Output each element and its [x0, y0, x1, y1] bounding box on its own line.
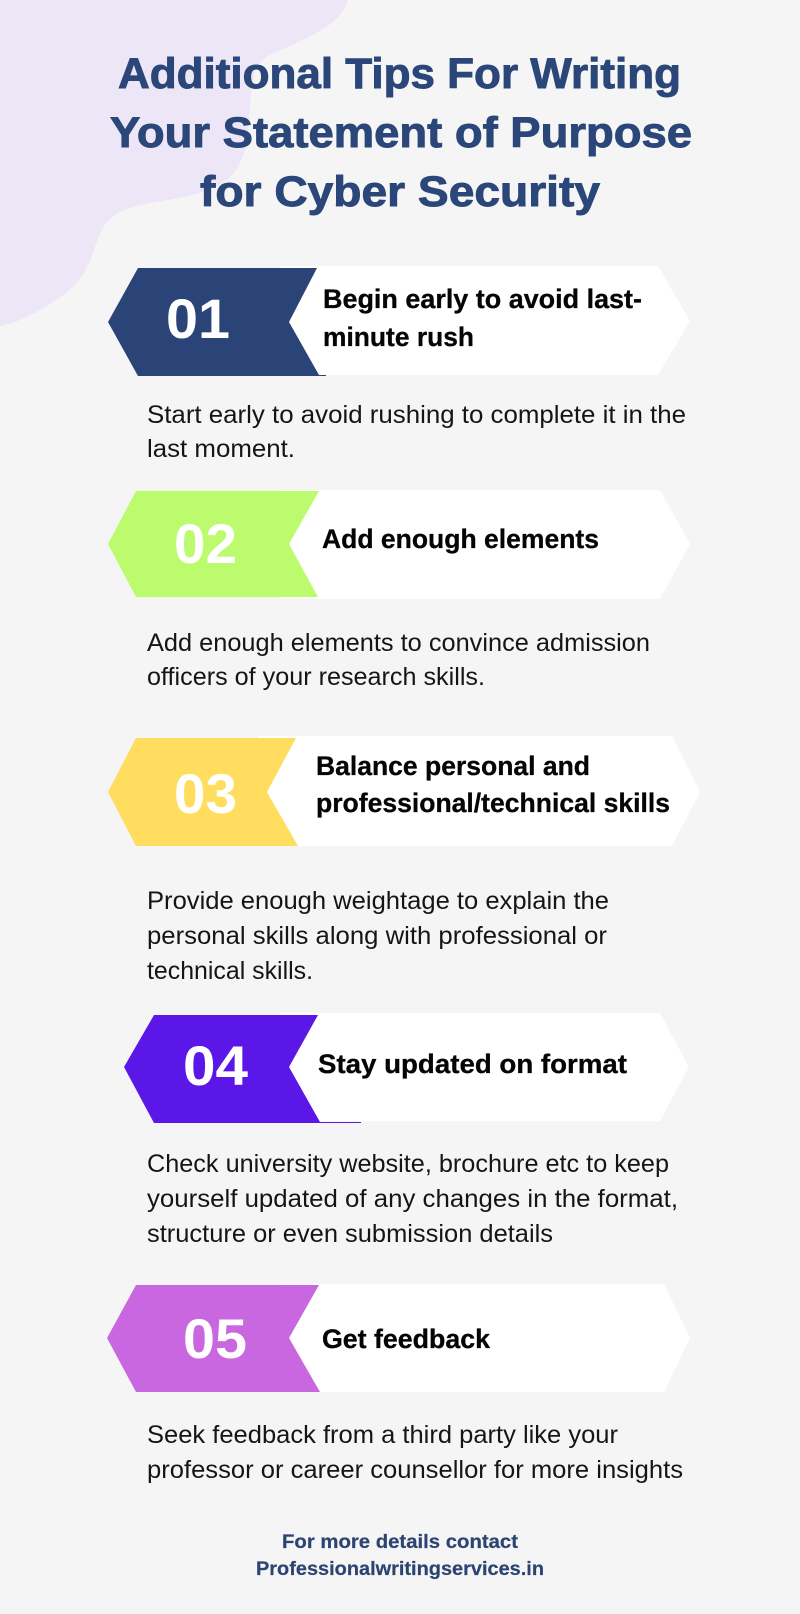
number tab: green [108, 491, 319, 597]
banner background: white arrow [258, 736, 700, 846]
number tab: yellow [108, 738, 298, 846]
number 01: 01 [166, 287, 230, 350]
panel: tip 05 banner [107, 1284, 690, 1392]
heading: tip 04: Stay updated on format [318, 1049, 627, 1079]
footer: contact details: For more details contact [282, 1532, 519, 1553]
number 03: 03 [174, 762, 237, 825]
title: Additional Tips For Writing [118, 50, 681, 98]
text block: tip 05 description: Seek feedback from a third party like your [147, 1421, 618, 1449]
panel: tip 03 banner [108, 736, 700, 846]
text block: tip 02 description: officers of your research skills. [147, 663, 485, 691]
panel: tip 04 banner [124, 1013, 689, 1123]
heading: tip 01 [323, 284, 642, 352]
panel: tip 02 banner [108, 490, 690, 599]
heading: tip 05: Get feedback [322, 1324, 491, 1354]
panel: tip 01 banner [108, 266, 690, 376]
number tab: navy [108, 268, 326, 376]
title [110, 50, 692, 216]
footer: contact details: Professionalwritingservices.in [256, 1559, 544, 1580]
banner background: white arrow [280, 490, 690, 599]
text block: tip 04 description: structure or even submission details [147, 1220, 553, 1248]
heading: tip 03: professional/technical skills [316, 788, 670, 818]
title: for Cyber Security [200, 168, 600, 216]
text block: tip 04 description: Check university website, brochure etc to keep [147, 1150, 669, 1178]
footer: contact details [256, 1532, 544, 1580]
text block: tip 03 description: Provide enough weightage to explain the [147, 887, 609, 915]
heading: tip 03: Balance personal and [316, 751, 590, 781]
heading: tip 03 [316, 751, 670, 818]
title: Your Statement of Purpose [110, 109, 692, 157]
heading: tip 02: Add enough elements [322, 524, 599, 554]
text block: tip 04 description: yourself updated of any changes in the format, [147, 1185, 678, 1213]
text block: tip 02 description [147, 629, 650, 691]
text block: tip 03 description: technical skills. [147, 957, 313, 985]
text block: tip 03 description: personal skills along with professional or [147, 922, 607, 950]
text block: tip 01 description: last moment. [147, 435, 295, 463]
heading: tip 01: minute rush [323, 322, 474, 352]
heading: tip 01: Begin early to avoid last- [323, 284, 642, 314]
text block: tip 05 description [147, 1421, 683, 1484]
text block: tip 04 description [147, 1150, 678, 1248]
text block: tip 03 description [147, 887, 609, 985]
text block: tip 01 description: Start early to avoid rushing to complete it in the [147, 401, 686, 429]
text block: tip 05 description: professor or career counsellor for more insights [147, 1456, 683, 1484]
text block: tip 01 description [147, 401, 686, 463]
number 04: 04 [183, 1034, 248, 1097]
number tab: magenta [107, 1285, 320, 1392]
number tab: violet [124, 1015, 361, 1123]
banner background: white arrow [280, 1284, 690, 1392]
number 05: 05 [183, 1307, 247, 1370]
number 02: 02 [174, 512, 237, 575]
banner background: white arrow [280, 1013, 689, 1121]
text block: tip 02 description: Add enough elements to convince admission [147, 629, 650, 657]
decorative blob: top-left background shape [0, 0, 348, 326]
banner background: white arrow [280, 266, 690, 375]
